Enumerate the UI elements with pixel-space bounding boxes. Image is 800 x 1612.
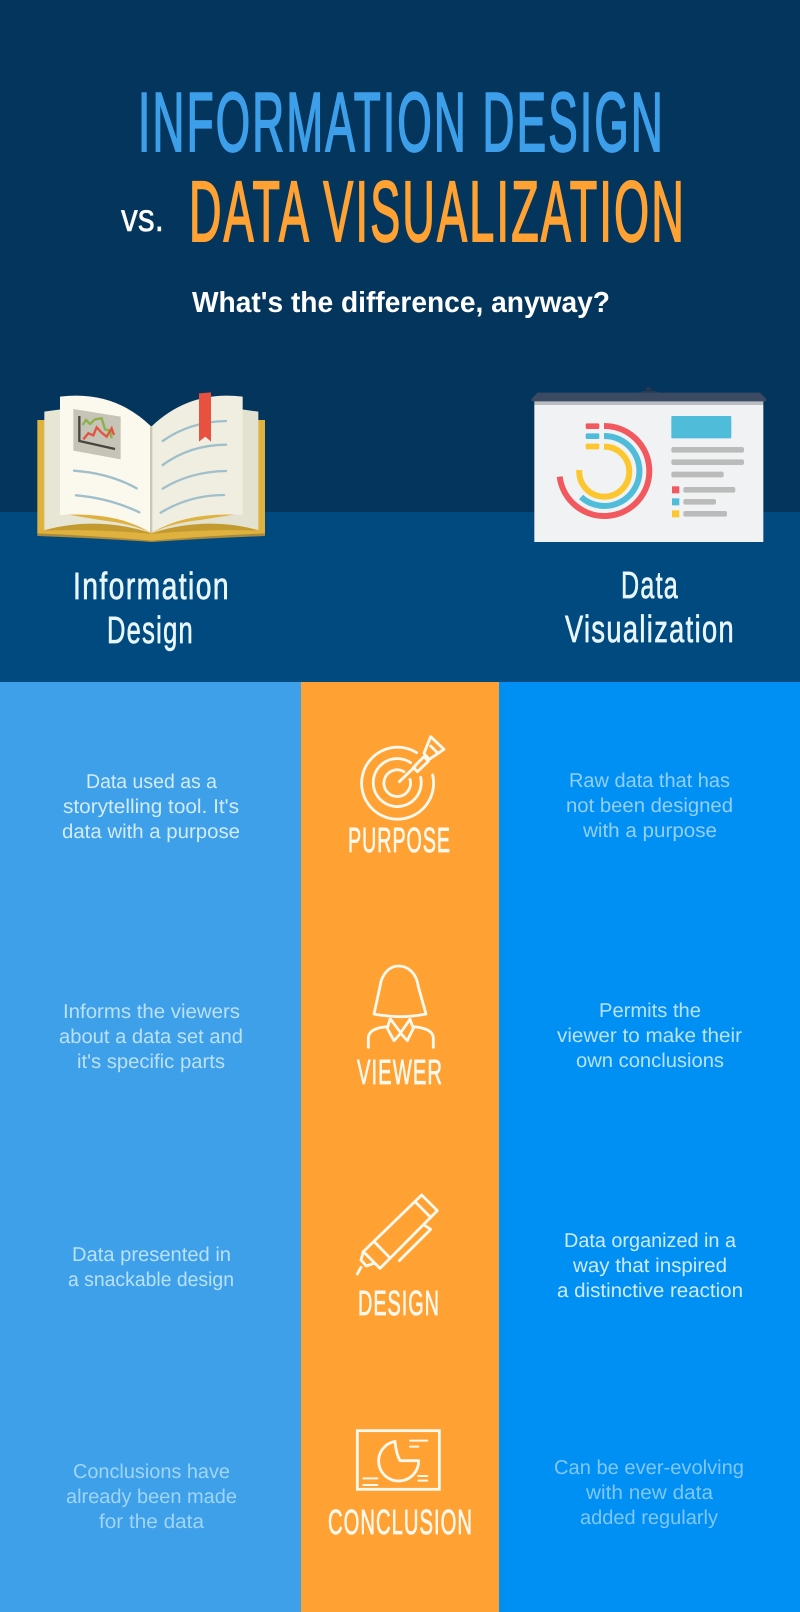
text: conclusion right: added regularly (580, 1507, 718, 1529)
text: viewer right (557, 1000, 742, 1072)
text: purpose left: Data used as a (86, 771, 218, 793)
text: purpose left: data with a purpose (62, 821, 240, 843)
text: viewer right: own conclusions (576, 1050, 724, 1072)
text: conclusion left: already been made (66, 1486, 237, 1508)
panel: centre column (301, 682, 499, 1612)
text: conclusion left: Conclusions have (73, 1461, 230, 1483)
text: viewer left: it's specific parts (77, 1051, 225, 1073)
text: purpose right (566, 770, 733, 842)
label: viewer: VIEWER (357, 1053, 443, 1092)
icon: pen (357, 1195, 437, 1274)
icon: open book (37, 392, 265, 542)
text: design right (557, 1230, 743, 1302)
heading: information design: Information (73, 566, 230, 608)
book page edge shadow (45, 522, 257, 534)
board legend squares (672, 486, 679, 517)
right outer pages (153, 409, 258, 533)
text: design left: a snackable design (68, 1269, 234, 1291)
text: viewer left: Informs the viewers (63, 1001, 240, 1023)
text: viewer right: Permits the (599, 1000, 701, 1022)
text: design left: Data presented in (72, 1244, 231, 1266)
label: design: DESIGN (358, 1284, 440, 1323)
left outer pages (44, 409, 151, 533)
icon: presentation chart (357, 1431, 439, 1489)
text: design right: a distinctive reaction (557, 1280, 743, 1302)
board text bars (671, 447, 744, 517)
text: design left (68, 1244, 234, 1291)
heading: information design (73, 566, 230, 652)
panel: left column (0, 682, 301, 1612)
icon: presentation board (532, 387, 766, 542)
label: purpose: PURPOSE (348, 821, 451, 860)
panel: right column (499, 682, 800, 1612)
text: viewer left: about a data set and (59, 1026, 243, 1048)
board top bar (532, 393, 766, 401)
heading: data visualization: Data (621, 565, 679, 607)
book cover (37, 420, 265, 541)
heading: information design: Design (107, 610, 194, 652)
text: viewer right: viewer to make their (557, 1025, 742, 1047)
right page (152, 396, 243, 533)
text: conclusion right: with new data (585, 1482, 714, 1504)
text: purpose left (62, 771, 240, 843)
left page (60, 396, 151, 533)
heading: data visualization: Visualization (565, 609, 735, 651)
panel: mid blue band (0, 512, 800, 682)
board panel (534, 405, 763, 542)
board mount (638, 387, 661, 393)
icon: target (362, 737, 444, 819)
text: conclusion left (66, 1461, 237, 1533)
text: design right: Data organized in a (564, 1230, 737, 1252)
label: conclusion: CONCLUSION (328, 1503, 473, 1542)
book spine fold (150, 426, 152, 533)
board title block (671, 416, 731, 438)
text: purpose right: not been designed (566, 795, 733, 817)
bookmark (199, 392, 211, 442)
title (121, 75, 686, 260)
text: purpose right: Raw data that has (569, 770, 730, 792)
panel: dark header background (0, 0, 800, 512)
text: purpose right: with a purpose (582, 820, 717, 842)
text: design right: way that inspired (572, 1255, 727, 1277)
title word: vs.: vs. (121, 197, 164, 240)
page chart (73, 409, 121, 459)
text: viewer left (59, 1001, 243, 1073)
icon: viewer (368, 966, 433, 1047)
subtitle: What's the difference, anyway? (192, 287, 610, 319)
page text lines (74, 421, 226, 513)
text: conclusion right (554, 1457, 744, 1529)
text: conclusion right: Can be ever-evolving (554, 1457, 744, 1479)
text: conclusion left: for the data (99, 1511, 205, 1533)
text: purpose left: storytelling tool. It's (63, 796, 239, 818)
radial chart (560, 423, 649, 516)
heading: data visualization (565, 565, 735, 651)
